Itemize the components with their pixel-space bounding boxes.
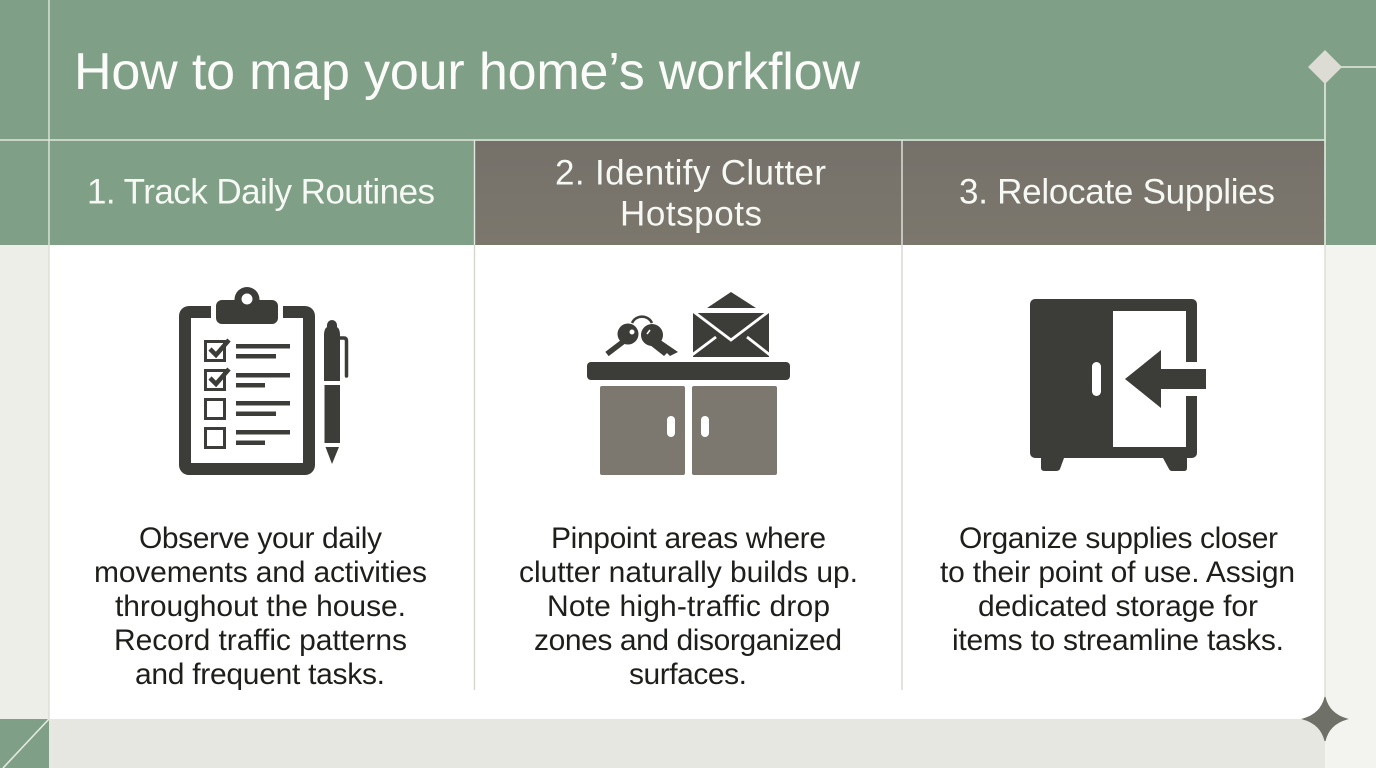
heading: step 3: 3. Relocate Supplies [959, 172, 1275, 212]
panel: main white content area [49, 245, 1325, 719]
text block: step 2 description: surfaces. [629, 658, 747, 691]
text block: step 1 description: throughout the house. [115, 590, 406, 623]
icon: diamond ornament [1308, 50, 1342, 84]
text block: step 3 description [940, 522, 1295, 657]
text block: step 1 description: Observe your daily [139, 522, 382, 555]
text block: step 3 description: Organize supplies closer [959, 522, 1278, 555]
heading: step 2 [555, 154, 826, 234]
text block: step 1 description: movements and activities [94, 556, 427, 589]
bottom band [49, 719, 1325, 768]
column header: step 3 background [902, 141, 1325, 245]
heading: step 1: 1. Track Daily Routines [87, 172, 435, 212]
text block: step 2 description: clutter naturally builds up. [519, 556, 858, 589]
icon: clipboard with checklist and pen [179, 287, 346, 475]
text block: step 1 description: Record traffic patterns [114, 624, 407, 657]
text block: step 2 description: Note high-traffic drop [547, 590, 830, 623]
text block: step 2 description: zones and disorganized [534, 624, 842, 657]
corner: green bottom-left square [0, 719, 49, 768]
heading: step 2: 2. Identify Clutter [555, 154, 826, 192]
text block: step 1 description [94, 522, 427, 691]
text block: step 3 description: to their point of use. Assign [940, 556, 1295, 589]
text block: step 3 description: dedicated storage for [978, 590, 1258, 623]
icon: keys and mail on a cabinet [587, 292, 790, 475]
title: How to map your home’s workflow [74, 43, 860, 101]
icon: four-point star ornament [1303, 697, 1347, 741]
text block: step 2 description [519, 522, 858, 691]
text block: step 1 description: and frequent tasks. [135, 658, 385, 691]
icon: cabinet with inward arrow [1030, 299, 1206, 471]
heading: step 2: Hotspots [620, 194, 762, 234]
text block: step 3 description: items to streamline tasks. [952, 624, 1284, 657]
column header: step 2 background [475, 141, 902, 245]
text block: step 2 description: Pinpoint areas where [551, 522, 826, 555]
title banner [0, 0, 1376, 245]
